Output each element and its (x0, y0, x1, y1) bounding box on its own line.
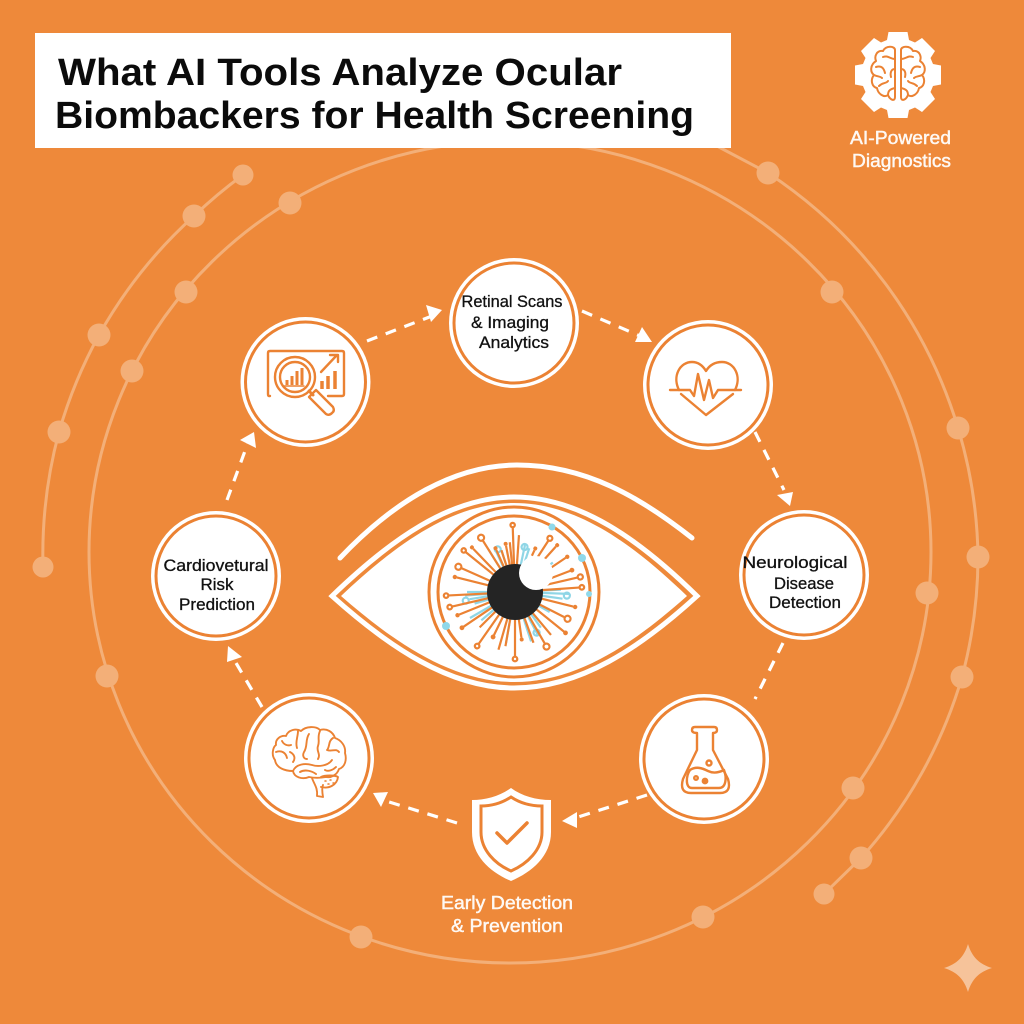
shield: early detection (441, 788, 573, 936)
title panel: What AI Tools Analyze Ocular (58, 52, 622, 94)
node: cardiovascular risk: Prediction (179, 596, 255, 614)
icon: flask (682, 727, 729, 793)
orbit: inner ring with nodes (89, 141, 938, 963)
iris blue data dots (442, 524, 592, 630)
node: retinal scans: Analytics (479, 334, 549, 352)
arrow: retinal scans to heart (582, 311, 652, 342)
node: analytics (240, 317, 370, 447)
eyebrow arc (340, 465, 692, 558)
node: heart health (643, 320, 773, 450)
orbit: outer right arc with nodes (715, 145, 990, 904)
icon: heart with pulse (670, 362, 741, 415)
node: neurological disease: Detection (769, 594, 841, 612)
node: cardiovascular risk (151, 511, 281, 641)
icon: magnifier over chart (268, 351, 344, 415)
node: neurological disease: Disease (774, 575, 834, 593)
title panel (35, 33, 731, 148)
badge: AI-powered diagnostics (850, 32, 951, 171)
decorative sparkle (944, 944, 992, 992)
arrow: analytics to retinal scans (367, 305, 442, 341)
icon: brain side view (273, 727, 346, 797)
shield: early detection: & Prevention (451, 916, 563, 936)
node: retinal scans: & Imaging (471, 314, 549, 332)
node: retinal scans: Retinal Scans (462, 293, 562, 311)
node: brain (244, 693, 374, 823)
node: cardiovascular risk: Cardiovetural (164, 557, 268, 575)
arrow: heart to neurological (755, 432, 793, 506)
arrow: shield to brain (373, 792, 457, 823)
eye white (341, 503, 687, 682)
arrow: neurological to flask (755, 643, 783, 699)
icon: shield with check (472, 788, 551, 881)
arrow: cardiovascular to analytics (227, 432, 256, 500)
label: early detection and prevention: Early Detection (441, 893, 573, 913)
pupil (487, 564, 543, 620)
node: neurological disease: Neurological (742, 554, 848, 572)
arrow: flask to shield (562, 795, 647, 828)
title panel: Biombackers for Health Screening (55, 95, 694, 137)
central eye (332, 465, 697, 688)
iris rings (429, 507, 599, 677)
eye outline (332, 497, 697, 688)
pupil highlight (519, 556, 553, 590)
iris circuit rays (444, 523, 584, 661)
badge label: AI-Powered (850, 128, 951, 148)
badge: AI-powered diagnostics: Diagnostics (852, 151, 951, 171)
node: cardiovascular risk: Risk (200, 576, 234, 594)
icon: gear with brain (855, 32, 941, 118)
orbit: outer left arc with nodes (32, 164, 254, 578)
arrow: brain to cardiovascular (227, 646, 262, 707)
node: retinal scans (449, 258, 579, 388)
node: neurological disease (739, 510, 869, 640)
node: lab flask (639, 694, 769, 824)
